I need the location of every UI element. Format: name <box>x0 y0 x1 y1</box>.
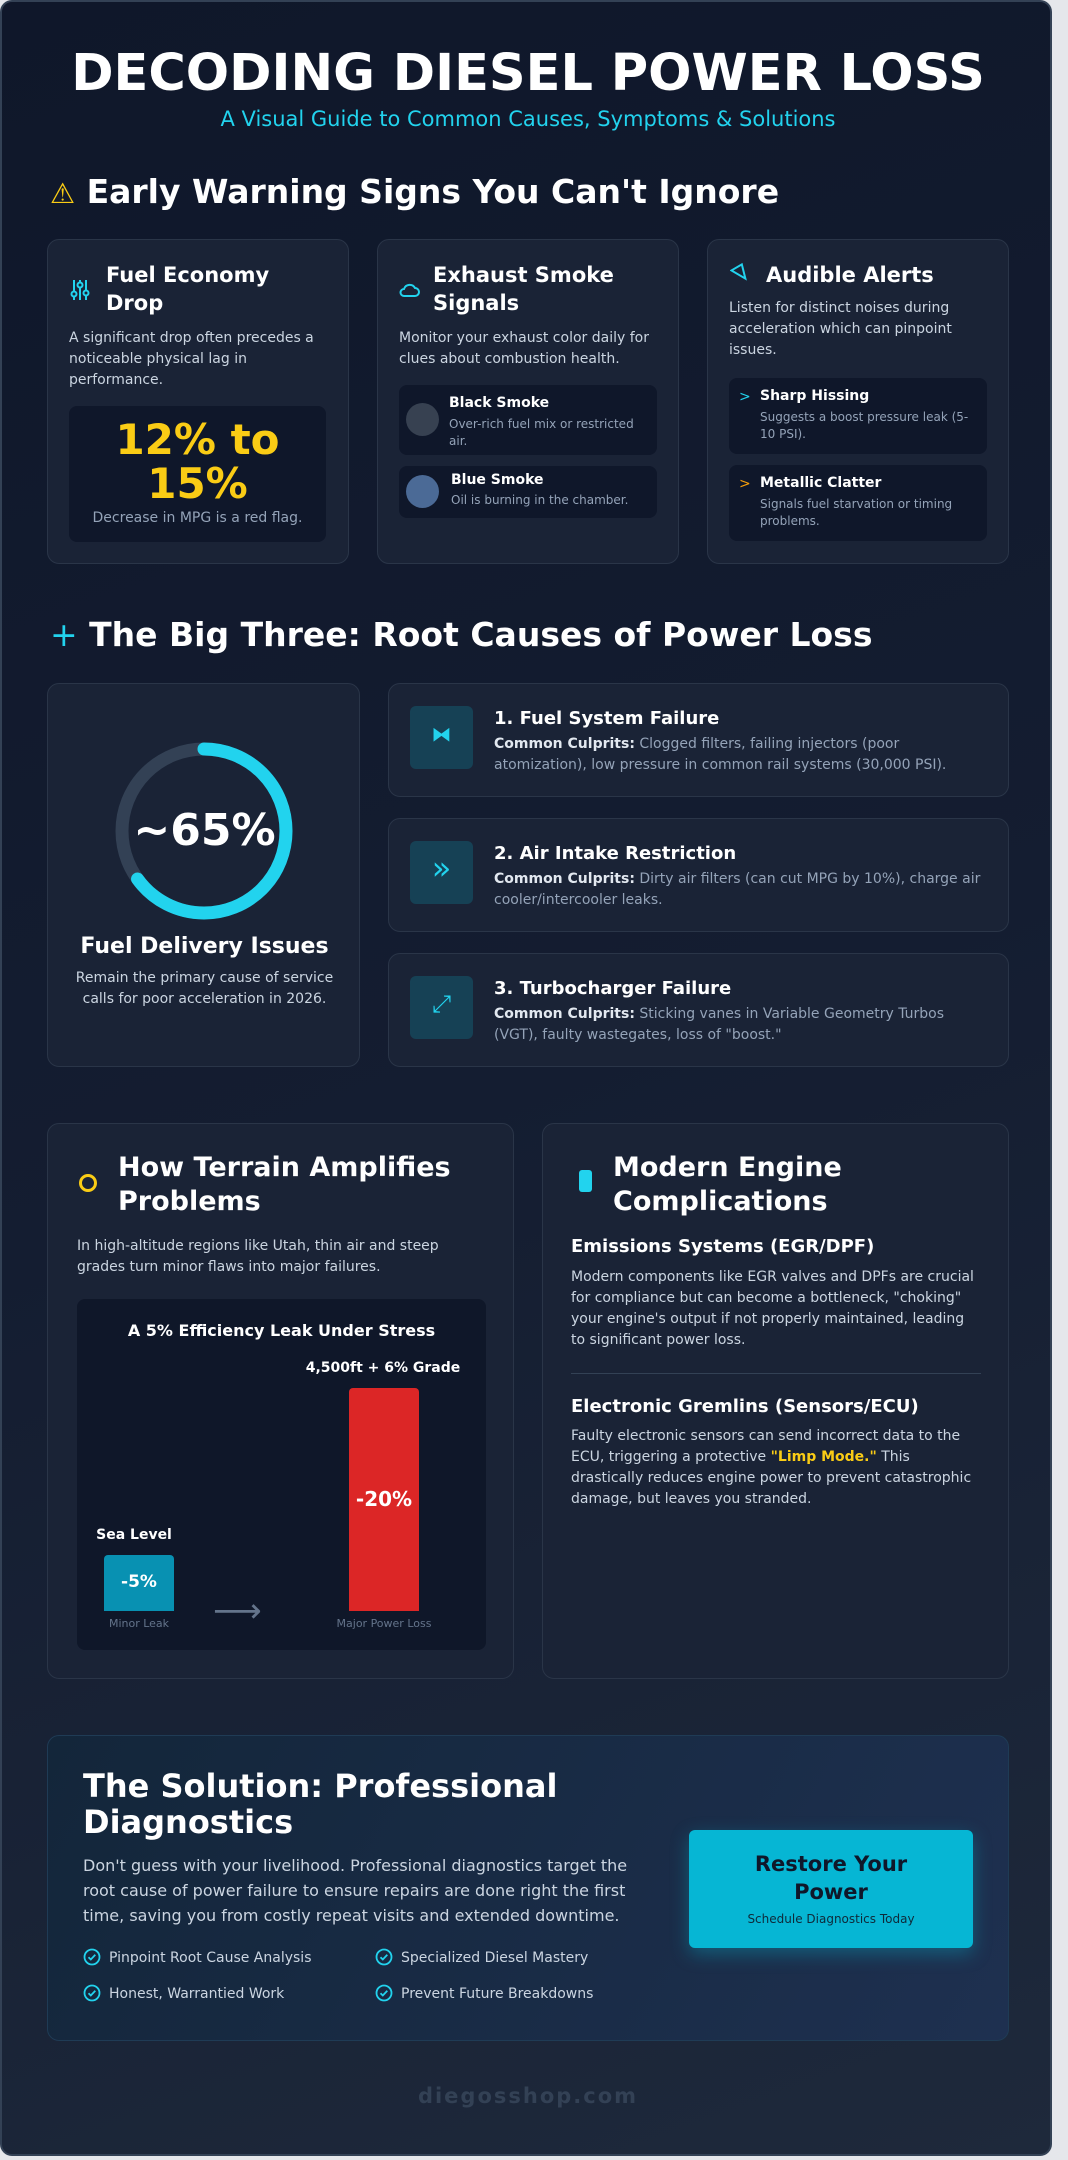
checklist: Specialized Diesel Mastery <box>401 1950 588 1966</box>
icon: phone <box>579 1170 592 1192</box>
title: Problems <box>118 1186 261 1217</box>
stat box: 12% to <box>115 415 280 464</box>
bar chart: -5% <box>121 1572 157 1592</box>
text: Common Culprits: Clogged filters, failing injectors (poor atomization), low pressure in common rail systems (30,000 PSI). <box>494 736 946 773</box>
label: Fuel Delivery Issues <box>80 934 329 959</box>
metallic clatter: Signals fuel starvation or timing problems. <box>760 497 952 528</box>
icon: bell <box>730 262 747 280</box>
heading: big three: + The Big Three: Root Causes of Power Loss <box>50 615 872 654</box>
panel: modern engine: Faulty electronic sensors can send incorrect data to the ECU, triggering a protective "Limp Mode." This drastically reduces engine power to prevent catastrophic damage, but leaves you stranded. <box>571 1428 971 1507</box>
title: The Solution: Professional <box>83 1767 557 1805</box>
CTA button: Power <box>794 1880 868 1904</box>
text: Listen for distinct noises during acceleration which can pinpoint issues. <box>729 300 952 358</box>
metallic clatter: Metallic Clatter <box>760 475 881 491</box>
sharp hissing: Suggests a boost pressure leak (5-10 PSI). <box>760 410 968 441</box>
card title: Signals <box>433 291 519 315</box>
title: DECODING DIESEL POWER LOSS <box>71 44 985 103</box>
electronic gremlins: Electronic Gremlins (Sensors/ECU) <box>571 1396 919 1417</box>
text: Common Culprits: Dirty air filters (can cut MPG by 10%), charge air cooler/intercooler leaks. <box>494 871 980 908</box>
cause 2 <box>388 818 1009 932</box>
black smoke <box>399 385 657 455</box>
metallic clatter: > <box>739 476 751 492</box>
cause 2: » <box>432 849 451 887</box>
sharp hissing: > <box>739 389 751 405</box>
checklist <box>84 1948 593 2002</box>
cause 3: ⤢ <box>432 990 451 1018</box>
text: Common Culprits: Sticking vanes in Variable Geometry Turbos (VGT), faulty wastegates, loss of "boost." <box>494 1006 944 1043</box>
bar chart: -20% <box>356 1487 412 1511</box>
card title <box>433 263 614 315</box>
panel: exhaust smoke <box>377 239 679 564</box>
heading: early warning signs: ⚠ Early Warning Signs You Can't Ignore <box>50 172 779 211</box>
panel: modern engine <box>542 1123 1009 1679</box>
panel: fuel economy drop <box>47 239 349 564</box>
icon <box>410 706 473 769</box>
title: 3. Turbocharger Failure <box>494 978 731 999</box>
icon: cloud <box>400 284 420 297</box>
icon <box>410 841 473 904</box>
checklist: Pinpoint Root Cause Analysis <box>109 1950 312 1966</box>
footer: diegosshop.com <box>418 2084 638 2108</box>
title: 1. Fuel System Failure <box>494 708 719 729</box>
bar chart: Major Power Loss <box>337 1617 431 1630</box>
title: How Terrain Amplifies <box>118 1152 451 1183</box>
bar chart: ⟶ <box>213 1591 262 1631</box>
stat box: Decrease in MPG is a red flag. <box>93 510 302 526</box>
icon: sliders <box>70 280 90 300</box>
title <box>118 1152 451 1217</box>
cause 3 <box>388 953 1009 1067</box>
bar chart: A 5% Efficiency Leak Under Stress <box>128 1321 435 1340</box>
panel: terrain <box>47 1123 514 1679</box>
percent: ~65% <box>133 805 276 856</box>
bar chart: 4,500ft + 6% Grade <box>306 1360 460 1376</box>
metallic clatter <box>729 465 987 541</box>
text: Monitor your exhaust color daily for clues about combustion health. <box>399 330 649 367</box>
cause 1 <box>388 683 1009 797</box>
subtitle: A Visual Guide to Common Causes, Symptoms & Solutions <box>220 107 836 131</box>
title: Diagnostics <box>83 1803 293 1841</box>
bar chart: Minor Leak <box>109 1617 169 1630</box>
card title: Exhaust Smoke <box>433 263 614 287</box>
panel: modern engine: Modern components like EGR valves and DPFs are crucial for compliance but can become a bottleneck, "choking" your engine's output if not properly maintained, leading to significant power loss. <box>571 1269 974 1348</box>
black smoke: Over-rich fuel mix or restricted air. <box>449 417 634 448</box>
checklist: Honest, Warrantied Work <box>109 1986 284 2002</box>
panel: audible alerts <box>707 239 1009 564</box>
CTA button: Restore Your <box>755 1852 907 1876</box>
CTA button <box>689 1830 973 1948</box>
sharp hissing: Sharp Hissing <box>760 388 869 404</box>
stat box: 15% <box>147 459 248 508</box>
blue smoke <box>399 466 657 518</box>
bar chart: Sea Level <box>96 1527 172 1543</box>
title: 2. Air Intake Restriction <box>494 843 736 864</box>
card title: Audible Alerts <box>766 263 934 287</box>
blue smoke: Oil is burning in the chamber. <box>451 493 628 507</box>
text: A significant drop often precedes a noticeable physical lag in performance. <box>69 330 314 388</box>
title <box>613 1152 842 1217</box>
cause 1: ⧓ <box>432 722 452 746</box>
description: Remain the primary cause of service calls for poor acceleration in 2026. <box>76 970 333 1007</box>
title: Complications <box>613 1186 828 1217</box>
stat box <box>69 406 326 542</box>
title: Modern Engine <box>613 1152 842 1183</box>
icon <box>410 976 473 1039</box>
panel: solution <box>47 1735 1009 2041</box>
title <box>83 1767 557 1841</box>
card title: Drop <box>106 291 163 315</box>
checklist: Prevent Future Breakdowns <box>401 1986 593 2002</box>
blue smoke: Blue Smoke <box>451 472 544 488</box>
card title <box>106 263 269 315</box>
CTA button: Schedule Diagnostics Today <box>747 1912 915 1926</box>
panel: fuel delivery ring <box>47 683 360 1067</box>
text: In high-altitude regions like Utah, thin air and steep grades turn minor flaws into major failures. <box>77 1238 439 1275</box>
black smoke: Black Smoke <box>449 395 549 411</box>
bar chart <box>77 1299 486 1650</box>
ring chart <box>116 742 292 920</box>
emissions: Emissions Systems (EGR/DPF) <box>571 1236 874 1257</box>
icon: gauge <box>79 1174 97 1192</box>
card title: Fuel Economy <box>106 263 269 287</box>
paragraph: Don't guess with your livelihood. Professional diagnostics target the root cause of power failure to ensure repairs are done right the first time, saving you from costly repeat visits and extended downtime. <box>83 1856 627 1925</box>
sharp hissing <box>729 378 987 454</box>
